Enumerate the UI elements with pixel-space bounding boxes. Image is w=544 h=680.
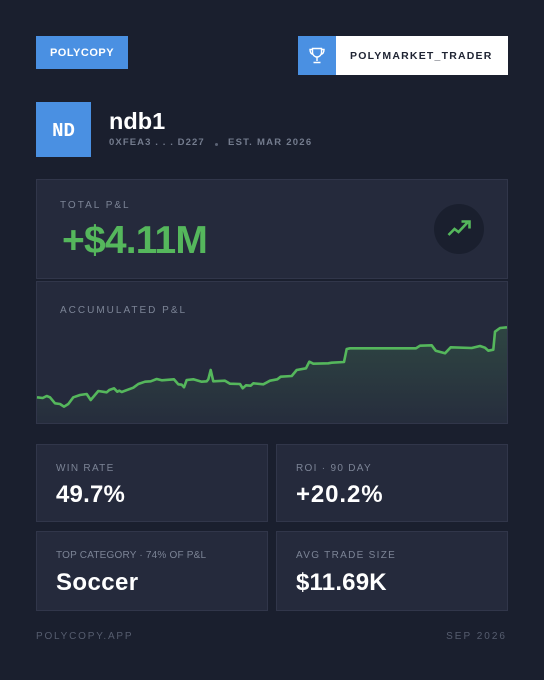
chart label: ACCUMULATED P&L [60,305,187,316]
brand badge: POLYCOPY: POLYCOPY [50,47,114,59]
wallet address: 0XFEA3 . . . D227 [109,137,205,148]
ROI label: ROI · 90 DAY [296,463,372,474]
avatar: ND: ND [52,120,75,142]
icon: trending up [434,204,484,254]
badge label: POLYMARKET_TRADER [350,50,493,62]
panel: win rate [36,444,268,522]
trader address and date [109,137,312,148]
brand badge: POLYCOPY [36,36,128,69]
total P&L value: +$4.11M [62,219,207,262]
panel: top category [36,531,268,611]
average trade size label: AVG TRADE SIZE [296,550,396,561]
ROI value: +20.2% [296,481,383,508]
footer: date: SEP 2026 [446,631,507,642]
total P&L label: TOTAL P&L [60,200,131,211]
trader name: ndb1 [109,108,165,134]
avatar: ND [36,102,91,157]
separator dot [215,143,218,146]
panel: average trade size [276,531,508,611]
average trade size value: $11.69K [296,569,387,596]
icon: trophy [298,36,336,75]
established date: EST. MAR 2026 [228,137,312,148]
top category value: Soccer [56,569,138,596]
panel: ROI [276,444,508,522]
panel: total P&L [36,179,508,279]
win rate label: WIN RATE [56,463,115,474]
trader badge [298,36,508,75]
top category label: TOP CATEGORY · 74% OF P&L [56,550,206,561]
panel: accumulated P&L chart [36,281,508,424]
footer: site: POLYCOPY.APP [36,631,133,642]
win rate value: 49.7% [56,481,125,508]
